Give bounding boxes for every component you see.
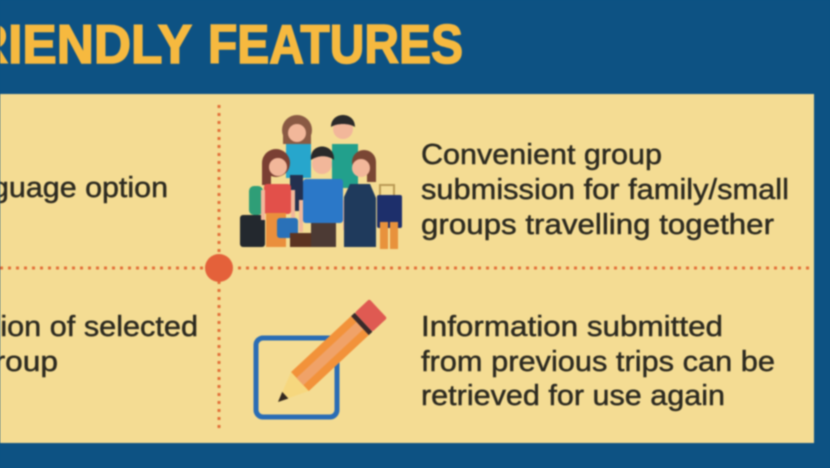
text: retrieve information: retrieved for use again (421, 380, 725, 412)
text: retrieve information (421, 311, 775, 412)
text: group submission (421, 139, 789, 241)
left suitcase and backpack (240, 215, 265, 247)
centre dot (205, 254, 233, 282)
text: selected group (0, 311, 198, 378)
text: retrieve information: Information submitted (421, 311, 723, 343)
centre man (311, 222, 336, 247)
briefcase (290, 233, 318, 247)
panel: features (0, 94, 814, 443)
text: group submission: Convenient group (421, 139, 662, 171)
right woman (352, 150, 376, 174)
icon: pencil and checkbox (256, 299, 387, 417)
back man (333, 119, 353, 139)
right suitcase (380, 185, 394, 197)
left woman (262, 149, 290, 177)
back woman (282, 115, 312, 145)
text: group submission: groups travelling together (421, 209, 774, 241)
text: retrieve information: from previous trips can be (421, 346, 775, 378)
text: group submission: submission for family/small (421, 174, 789, 206)
icon: family with luggage (240, 115, 402, 249)
title (0, 13, 463, 75)
blue handbag (277, 218, 298, 238)
title: FEATURES (208, 13, 463, 75)
